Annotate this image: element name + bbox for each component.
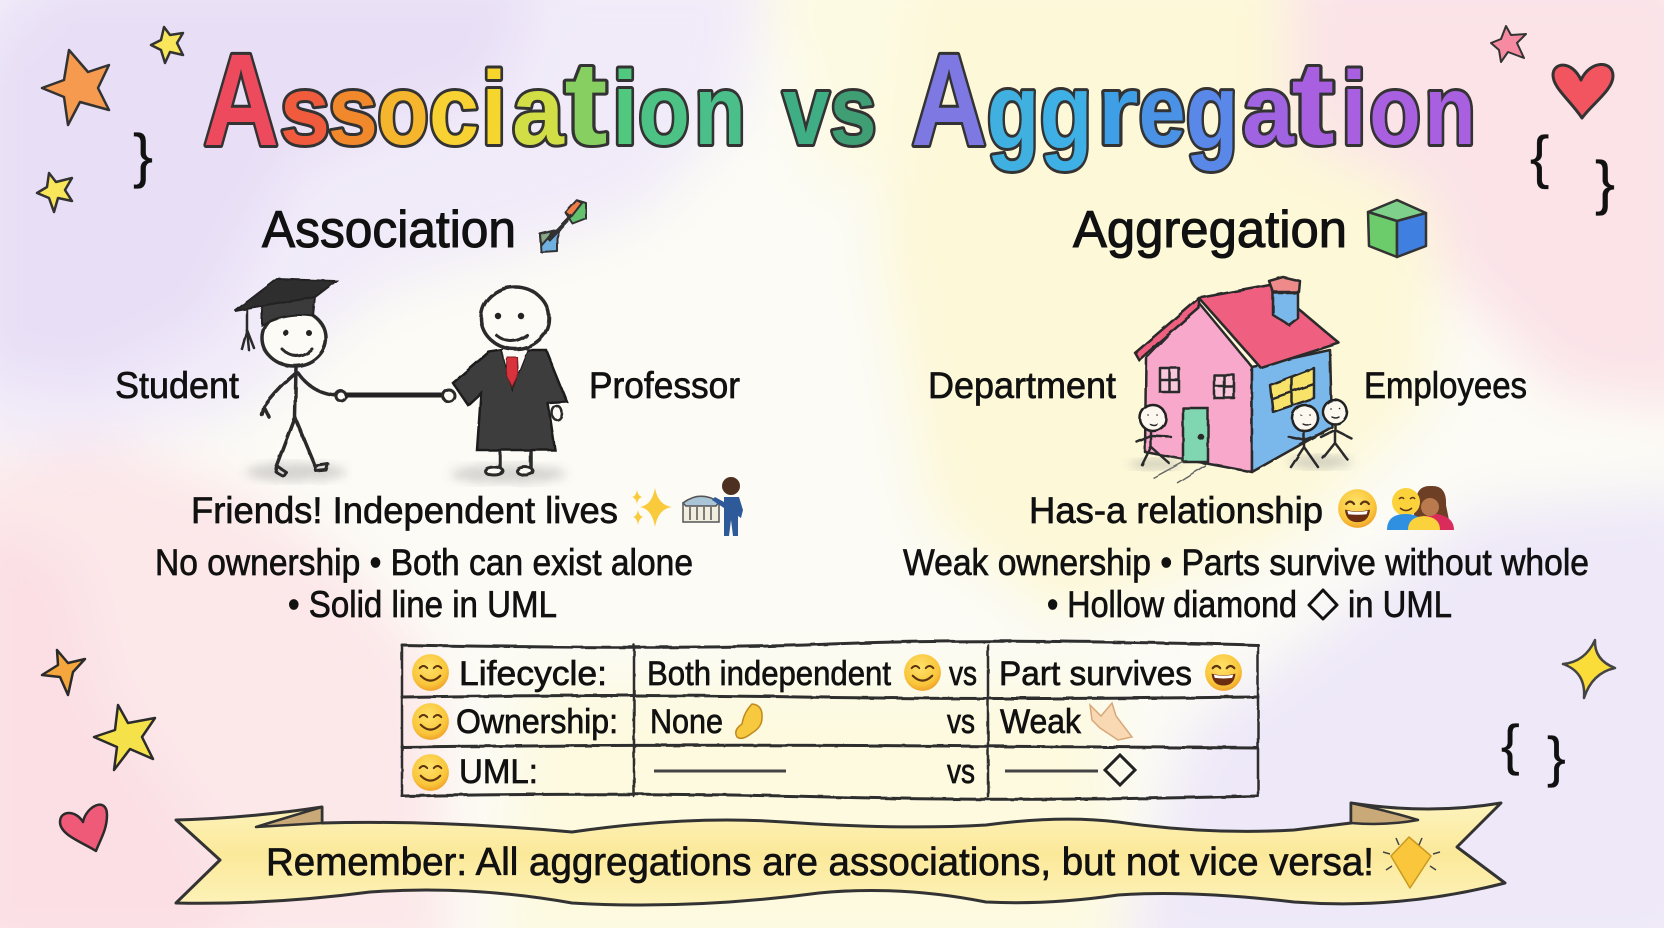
window yellow <box>1270 368 1314 412</box>
icon: orange star <box>42 650 85 695</box>
label: Department: Department <box>928 365 1117 406</box>
title word: Association: A <box>203 28 279 174</box>
row label: Ownership: <box>456 703 618 741</box>
row label: Lifecycle: <box>459 655 607 693</box>
decorations: bottom left <box>42 650 155 851</box>
right fold <box>1351 803 1418 824</box>
title word: Association: i <box>481 49 507 166</box>
path lines <box>1153 462 1206 483</box>
solid association line <box>347 392 441 398</box>
stick figures <box>1129 400 1352 469</box>
hand <box>336 391 346 401</box>
icon: red heart <box>1553 64 1613 118</box>
brace right: } <box>1595 149 1615 216</box>
brace left: { <box>1530 125 1549 190</box>
shirt <box>502 350 527 388</box>
title word: Aggregation: A <box>911 28 987 174</box>
row: lifecycle <box>412 654 1242 693</box>
text: association points line 2: • Solid line in UML <box>288 584 557 625</box>
row label: UML: <box>459 753 538 791</box>
title word: Association: n <box>694 56 746 165</box>
icon: people emoji <box>1387 486 1454 530</box>
title word: Aggregation <box>911 28 1476 174</box>
icon: cube <box>1368 200 1426 257</box>
title word: Association: i <box>612 49 638 166</box>
icon: yellow star <box>94 705 155 770</box>
front wall <box>1145 303 1252 472</box>
caption: friends: Friends! Independent lives <box>191 490 618 531</box>
illustration: house <box>1135 277 1339 483</box>
shadow <box>246 463 346 481</box>
shadow <box>450 465 566 483</box>
icon: person <box>712 477 743 536</box>
employee 1 <box>1137 405 1171 465</box>
line with hollow diamond <box>1005 755 1135 785</box>
label: Employees: Employees <box>1364 365 1527 406</box>
emoji <box>1205 654 1242 691</box>
title word: Aggregation: a <box>1242 56 1295 166</box>
panel: aggregation <box>903 200 1589 625</box>
table grid <box>402 641 1258 799</box>
title word: vs: v <box>783 56 830 165</box>
gown <box>453 350 567 450</box>
graduation cap <box>235 279 336 350</box>
ground shadows <box>1129 459 1181 469</box>
title word: Association: t <box>564 38 608 170</box>
title word: Association: o <box>638 56 690 165</box>
association value: Both independent <box>647 655 892 693</box>
title word: Association <box>203 28 746 174</box>
label: Professor: Professor <box>589 365 740 406</box>
title word: Aggregation: t <box>1291 38 1335 170</box>
banner text: Remember: All aggregations are associations, but not vice versa! <box>266 841 1374 884</box>
title word: Aggregation: o <box>1369 56 1421 165</box>
title <box>203 28 1476 174</box>
label: Student: Student <box>115 365 240 406</box>
text: aggregation points line 2: • Hollow diamond <box>1047 584 1297 625</box>
left fold <box>256 807 322 827</box>
roof <box>1199 285 1339 368</box>
icon: pink heart <box>60 805 107 851</box>
icon: sparkles <box>632 488 672 527</box>
emoji <box>412 654 449 691</box>
title word: Aggregation: i <box>1341 49 1367 166</box>
icon: link arrow <box>540 200 586 252</box>
icon: pink star <box>1491 26 1526 62</box>
solid line <box>654 770 786 772</box>
icon: pinching hand <box>1090 703 1132 740</box>
title word: Aggregation: n <box>1424 56 1476 165</box>
vs: vs <box>947 753 975 791</box>
text: association points line 1: No ownership • Both can exist alone <box>155 542 693 583</box>
vs: vs <box>949 655 977 693</box>
title word: Association: o <box>377 56 429 165</box>
icon: yellow hand <box>736 704 762 738</box>
icon: small yellow star <box>151 27 183 63</box>
illustration: student <box>235 279 346 481</box>
heading: Aggregation: Aggregation <box>1073 201 1347 259</box>
title word: Aggregation: g <box>1040 50 1092 171</box>
employee 3 <box>1321 400 1351 460</box>
banner <box>176 803 1505 905</box>
decorations: bottom right <box>1501 640 1615 788</box>
comparison table <box>402 641 1258 799</box>
title word: Association: c <box>429 56 479 165</box>
brace: } <box>133 122 153 189</box>
emoji <box>904 654 941 691</box>
brace left: { <box>1501 713 1520 776</box>
title word: Aggregation: g <box>1186 50 1238 171</box>
icon: yellow star <box>37 173 72 212</box>
title word: Association: s <box>328 56 378 165</box>
decorations: top left <box>37 27 183 212</box>
title word: vs: s <box>830 56 876 165</box>
aggregation value: Part survives <box>999 655 1192 693</box>
title word: vs <box>783 56 876 165</box>
row: ownership <box>412 703 1132 741</box>
tie <box>506 357 518 387</box>
title word: Association: s <box>280 56 330 165</box>
window middle <box>1214 375 1234 398</box>
title word: Aggregation: e <box>1139 56 1185 165</box>
icon: orange star <box>42 50 109 125</box>
window left <box>1160 368 1179 392</box>
vs: vs <box>947 703 975 741</box>
illustration: professor <box>443 287 567 483</box>
ribbon body <box>176 803 1505 905</box>
icon: four point star <box>1563 640 1615 698</box>
icon: light gem <box>1383 837 1440 888</box>
door <box>1183 408 1208 462</box>
title word: Aggregation: g <box>987 50 1039 171</box>
chimney <box>1273 293 1298 325</box>
head <box>481 287 549 349</box>
text: aggregation points line 2: in UML <box>1348 584 1452 625</box>
association value: None <box>650 703 723 741</box>
icon: grin emoji <box>1338 489 1377 528</box>
decorations: top right <box>1491 26 1613 118</box>
aggregation value: Weak <box>1000 703 1082 741</box>
head <box>262 310 326 366</box>
text: aggregation points line 1: Weak ownership • Parts survive without whole <box>903 542 1589 583</box>
legs <box>500 448 531 470</box>
panel: association <box>115 200 743 625</box>
employee 2 <box>1289 405 1323 467</box>
emoji <box>412 754 449 791</box>
row: uml <box>412 753 1135 791</box>
side wall <box>1252 350 1332 472</box>
body and limbs <box>262 367 336 466</box>
heading: Association: Association <box>262 201 516 259</box>
brace right: } <box>1547 725 1566 788</box>
icon: building <box>683 496 719 522</box>
hands <box>443 390 455 402</box>
title word: Association: a <box>512 56 565 166</box>
caption: has-a relationship: Has-a relationship <box>1029 490 1323 531</box>
emoji <box>412 703 449 740</box>
title word: Aggregation: r <box>1097 56 1139 165</box>
